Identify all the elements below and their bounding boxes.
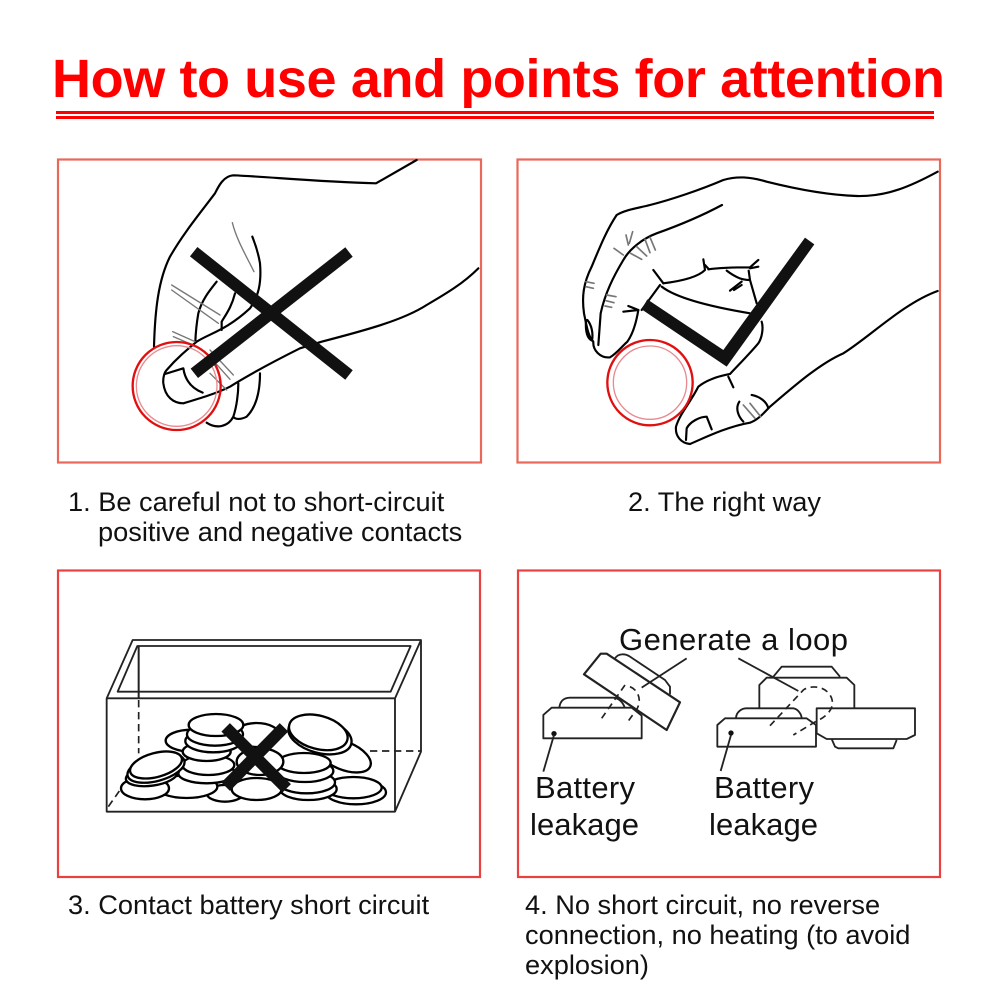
label: battery leakage right: Battery: [714, 770, 814, 805]
illustration: stacked batteries touching: [717, 658, 915, 771]
label: battery leakage left: leakage: [530, 807, 639, 842]
icon: black cross: [226, 727, 287, 788]
title: How to use and points for attention: [52, 49, 945, 109]
caption 1: 1. Be careful not to short-circuit: [68, 486, 445, 517]
icon: black check mark: [642, 238, 814, 367]
label: battery leakage right: leakage: [709, 807, 818, 842]
illustration: glass box: [107, 640, 421, 812]
panel: right way hand: [518, 160, 940, 462]
caption 4: explosion): [525, 949, 649, 980]
caption 1: positive and negative contacts: [98, 516, 462, 547]
illustration: hand pinching coin cell: [154, 160, 478, 426]
panel: batteries piled in a box: [58, 570, 480, 877]
icon: coin cell: [133, 342, 221, 430]
illustration: tilted battery touching battery: [543, 654, 687, 772]
caption 4: 4. No short circuit, no reverse: [525, 889, 880, 920]
icon: coin cell: [607, 340, 693, 425]
panel: short-circuit hand, wrong way: [58, 160, 481, 462]
title double underline: [56, 111, 934, 119]
illustration: pile of coin cells: [121, 708, 386, 804]
caption 4: connection, no heating (to avoid: [525, 919, 910, 950]
caption 2: 2. The right way: [628, 486, 821, 517]
panel: leakage creating a loop: [518, 570, 940, 877]
label: generate a loop: Generate a loop: [619, 622, 848, 657]
illustration: hand holding coin cell by edge: [583, 172, 938, 444]
label: battery leakage left: Battery: [535, 770, 636, 805]
icon: black cross: [194, 252, 349, 375]
caption 3: 3. Contact battery short circuit: [68, 889, 430, 920]
